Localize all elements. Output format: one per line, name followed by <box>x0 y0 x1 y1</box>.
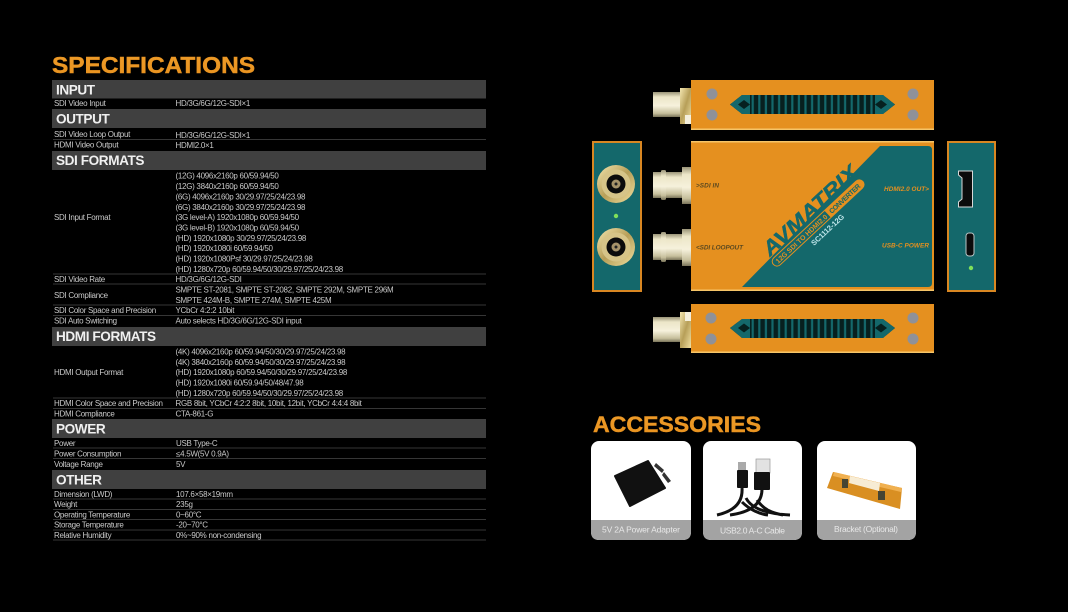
rows: sdi formats: (3G level-A) 1920x1080p 60/59.94/50 <box>176 213 300 222</box>
rows: hdmi formats: (4K) 3840x2160p 60/59.94/50/30/29.97/25/24/23.98 <box>176 358 346 367</box>
rows: other: -20~70°C <box>176 520 208 530</box>
section bar: hdmi formats <box>52 327 486 346</box>
rows: hdmi formats: (HD) 1920x1080i 60/59.94/50/48/47.98 <box>176 378 304 388</box>
rows: sdi formats: SDI Compliance <box>54 291 109 300</box>
section bar: sdi formats: SDI FORMATS <box>56 153 144 168</box>
rows: sdi formats: HD/3G/6G/12G-SDI <box>176 275 242 284</box>
rows: sdi formats: (HD) 1920x1080i 60/59.94/50 <box>176 244 273 253</box>
rows: output <box>54 130 251 150</box>
port: HDMI <box>958 171 972 207</box>
section bar: hdmi formats: HDMI FORMATS <box>56 329 156 344</box>
rows: sdi formats: YCbCr 4:2:2 10bit <box>176 306 235 315</box>
icon: usb cable <box>717 459 790 515</box>
section bar: power <box>52 419 486 438</box>
connector: upper BNC <box>597 165 635 203</box>
rows: hdmi formats: (HD) 1280x720p 60/59.94/50/30/29.97/25/24/23.98 <box>176 389 344 398</box>
product: bottom view <box>653 304 934 353</box>
product: right panel <box>948 142 995 291</box>
badge: converter name <box>770 178 866 268</box>
label: USB-C power: USB-C POWER <box>882 242 929 250</box>
rows: power: Power Consumption <box>54 450 121 458</box>
model number: SC1112-12G <box>809 212 846 247</box>
card: usb cable <box>703 441 802 540</box>
rows: sdi formats: SDI Input Format <box>54 213 111 222</box>
card: bracket <box>817 441 916 540</box>
label: SDI in: >SDI IN <box>696 182 719 190</box>
section bar: sdi formats <box>52 151 486 170</box>
rows: sdi formats: (HD) 1280x720p 60/59.94/50/30/29.97/25/24/23.98 <box>176 265 344 274</box>
rows: input <box>54 99 251 108</box>
connector: SDI in <box>653 167 691 204</box>
port: USB-C <box>966 233 974 256</box>
caption: Bracket (Optional) <box>834 524 898 534</box>
caption: 5V 2A Power Adapter <box>602 524 680 534</box>
rows: power <box>54 439 229 469</box>
rows: power: Power <box>54 439 76 448</box>
rows: input: HD/3G/6G/12G-SDI×1 <box>176 99 251 108</box>
rows: sdi formats: (12G) 3840x2160p 60/59.94/50 <box>176 182 279 191</box>
section bar: other: OTHER <box>56 472 102 488</box>
icon: bracket <box>827 472 902 509</box>
rows: other <box>54 490 261 540</box>
rows: power: Voltage Range <box>54 460 104 469</box>
rows: other: Storage Temperature <box>54 520 124 530</box>
rows: sdi formats: SDI Auto Switching <box>54 316 117 326</box>
rows: other: Operating Temperature <box>54 510 131 520</box>
label: SDI loop out: <SDI LOOPOUT <box>696 244 744 252</box>
product: left panel <box>593 142 641 291</box>
rows: sdi formats: Auto selects HD/3G/6G/12G-SDI input <box>176 316 302 326</box>
title: accessories: ACCESSORIES <box>593 412 761 437</box>
rows: output: HDMI Video Output <box>54 140 119 150</box>
rows: sdi formats: SMPTE ST-2081, SMPTE ST-2082, SMPTE 292M, SMPTE 296M <box>176 286 394 294</box>
rows: sdi formats: (3G level-B) 1920x1080p 60/59.94/50 <box>176 224 300 232</box>
rows: other: 107.6×58×19mm <box>176 490 233 499</box>
panel: specifications table <box>52 80 486 540</box>
logo: AVMATRIX: AVMATRIX <box>758 160 864 261</box>
rows: other: Dimension (LWD) <box>54 490 113 499</box>
section bar: power: POWER <box>56 422 106 436</box>
icon: power adapter <box>615 461 671 506</box>
product: front view <box>653 141 934 291</box>
connector: SDI loop out <box>653 229 691 266</box>
rows: sdi formats: (6G) 3840x2160p 30/29.97/25/24/23.98 <box>176 203 306 212</box>
rows: sdi formats: (6G) 4096x2160p 30/29.97/25/24/23.98 <box>176 192 306 202</box>
rows: sdi formats: SMPTE 424M-B, SMPTE 274M, SMPTE 425M <box>176 296 332 305</box>
product: top view <box>653 80 934 130</box>
caption: USB2.0 A-C Cable <box>720 526 785 536</box>
rows: hdmi formats <box>54 348 363 418</box>
badge: converter name: CONVERTER <box>828 183 862 216</box>
rows: sdi formats: SDI Color Space and Precision <box>54 306 156 315</box>
section bar: other <box>52 470 486 489</box>
rows: output: HD/3G/6G/12G-SDI×1 <box>176 131 251 140</box>
indicator: green led <box>614 214 618 218</box>
rows: hdmi formats: (HD) 1920x1080p 60/59.94/50/30/29.97/25/24/23.98 <box>176 368 348 377</box>
label: HDMI out: HDMI2.0 OUT> <box>884 186 929 193</box>
rows: other: Weight <box>54 500 78 509</box>
rows: sdi formats: SDI Video Rate <box>54 275 106 284</box>
rows: hdmi formats: CTA-861-G <box>176 410 213 418</box>
rows: sdi formats: (HD) 1920x1080Psf 30/29.97/25/24/23.98 <box>176 254 313 264</box>
rows: other: 0%~90% non-condensing <box>176 531 261 540</box>
rows: hdmi formats: HDMI Color Space and Precision <box>54 399 163 408</box>
rows: other: Relative Humidity <box>54 531 112 540</box>
rows: output: SDI Video Loop Output <box>54 130 131 139</box>
section bar: input: INPUT <box>56 82 96 98</box>
title: specifications: SPECIFICATIONS <box>52 52 255 78</box>
card: power adapter <box>591 441 691 540</box>
rows: hdmi formats: HDMI Compliance <box>54 410 115 418</box>
section bar: input <box>52 80 486 98</box>
rows: sdi formats: (12G) 4096x2160p 60/59.94/50 <box>176 172 279 180</box>
rows: hdmi formats: RGB 8bit, YCbCr 4:2:2 8bit, 10bit, 12bit, YCbCr 4:4:4 8bit <box>176 399 363 408</box>
rows: power: 5V <box>176 460 186 469</box>
connector: lower BNC <box>597 228 635 266</box>
rows: power: USB Type-C <box>176 439 218 448</box>
rows: power: ≤4.5W(5V 0.9A) <box>176 450 229 458</box>
rows: sdi formats <box>54 172 394 326</box>
section bar: output <box>52 109 486 128</box>
rows: hdmi formats: (4K) 4096x2160p 60/59.94/50/30/29.97/25/24/23.98 <box>176 348 346 356</box>
rows: sdi formats: (HD) 1920x1080p 30/29.97/25/24/23.98 <box>176 234 307 243</box>
indicator: green led <box>969 266 973 270</box>
badge: converter name: 12G SDI TO HDMI2.0 <box>775 214 829 265</box>
section bar: output: OUTPUT <box>56 112 110 126</box>
rows: hdmi formats: HDMI Output Format <box>54 368 124 377</box>
rows: other: 235g <box>176 500 193 509</box>
rows: input: SDI Video Input <box>54 99 107 108</box>
rows: output: HDMI2.0×1 <box>176 141 214 150</box>
rows: other: 0~60°C <box>176 510 202 520</box>
